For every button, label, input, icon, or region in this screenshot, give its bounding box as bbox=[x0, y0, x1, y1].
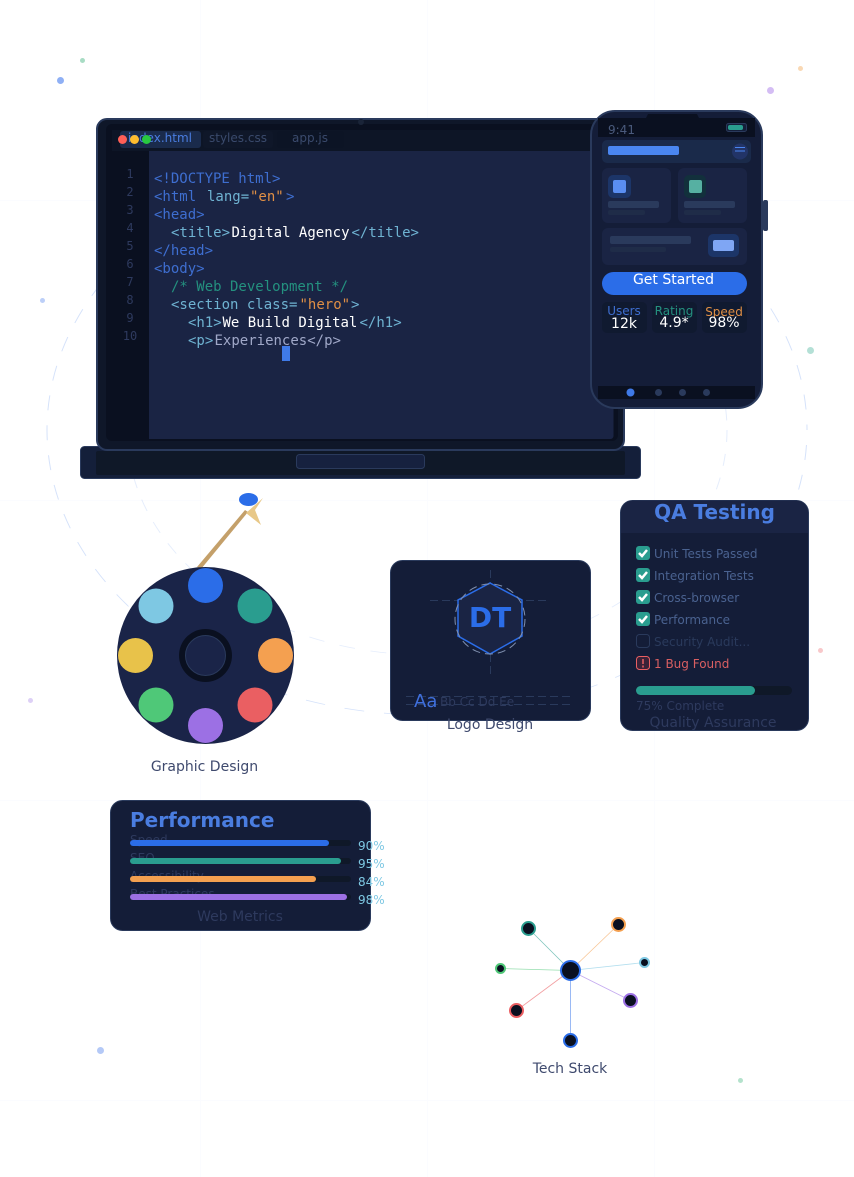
editor tabs bbox=[120, 131, 344, 148]
line numbers bbox=[123, 167, 137, 343]
code text: <p> bbox=[188, 333, 213, 349]
logo hexagon bbox=[455, 583, 525, 654]
code text: "en" bbox=[250, 189, 284, 205]
orbit rings bbox=[47, 145, 807, 715]
code text: <!DOCTYPE html> bbox=[154, 171, 280, 187]
palette centre bbox=[179, 629, 232, 682]
tech stack network: Tech Stack bbox=[532, 1061, 608, 1077]
line numbers: 9 bbox=[126, 311, 134, 325]
qa testing panel: Quality Assurance bbox=[649, 715, 777, 731]
checklist: Unit Tests Passed bbox=[654, 547, 758, 561]
qa progress bar: 75% Complete bbox=[636, 699, 724, 713]
performance panel bbox=[110, 800, 385, 930]
network links bbox=[500, 924, 644, 1040]
checklist: 1 Bug Found bbox=[654, 657, 729, 671]
qa testing panel bbox=[620, 500, 808, 731]
metric labels: SEO bbox=[130, 851, 155, 865]
phone button bbox=[602, 272, 747, 295]
qa testing panel: QA Testing bbox=[654, 500, 775, 524]
phone nav bar bbox=[598, 386, 755, 399]
laptop bbox=[80, 119, 640, 478]
editor tabs: app.js bbox=[292, 131, 328, 145]
checklist: Integration Tests bbox=[654, 569, 754, 583]
checklist: Security Audit... bbox=[654, 635, 750, 649]
line numbers: 7 bbox=[126, 275, 134, 289]
code text: <title> bbox=[171, 225, 230, 241]
code text: </title> bbox=[352, 225, 419, 241]
logo hexagon: DT bbox=[469, 601, 511, 634]
phone bbox=[591, 111, 768, 408]
metric values: 90% bbox=[358, 839, 385, 853]
code text: Experiences</p> bbox=[214, 333, 341, 349]
phone status bar bbox=[598, 114, 755, 137]
metric labels: Accessibility bbox=[130, 869, 204, 883]
performance panel: Web Metrics bbox=[197, 909, 283, 925]
line numbers: 10 bbox=[123, 329, 137, 343]
type specimen: Aa bbox=[414, 691, 437, 712]
line numbers: 6 bbox=[126, 257, 134, 271]
tech stack network bbox=[496, 918, 649, 1077]
code text: > bbox=[286, 189, 294, 205]
qa progress bar bbox=[636, 686, 792, 713]
line numbers: 3 bbox=[126, 203, 134, 217]
phone feature cards bbox=[602, 168, 747, 265]
logo design panel: Logo Design bbox=[447, 717, 533, 733]
phone stats: Rating bbox=[655, 304, 693, 318]
phone stats bbox=[602, 302, 747, 333]
network nodes bbox=[496, 918, 649, 1047]
phone stats: 12k bbox=[611, 316, 638, 332]
phone stats: 4.9* bbox=[659, 315, 689, 331]
line numbers: 5 bbox=[126, 239, 134, 253]
code text: <body> bbox=[154, 261, 205, 277]
checklist bbox=[636, 546, 758, 671]
code text: "hero" bbox=[300, 297, 350, 313]
phone stats: 98% bbox=[708, 315, 740, 331]
checklist: Cross-browser bbox=[654, 591, 739, 605]
metric values: 95% bbox=[358, 857, 385, 871]
paintbrush bbox=[197, 493, 263, 569]
metric labels bbox=[130, 833, 215, 901]
laptop base bbox=[80, 446, 640, 478]
code text: </head> bbox=[154, 243, 213, 259]
laptop screen frame bbox=[97, 119, 624, 450]
metric bars bbox=[130, 840, 351, 900]
type specimen bbox=[406, 691, 573, 712]
code text bbox=[154, 171, 419, 361]
metric values: 98% bbox=[358, 893, 385, 907]
performance panel: Performance bbox=[130, 808, 274, 832]
editor tabs: styles.css bbox=[209, 131, 267, 145]
metric values bbox=[358, 839, 385, 907]
logo design panel bbox=[390, 560, 590, 733]
code text: </h1> bbox=[360, 315, 402, 331]
metric values: 84% bbox=[358, 875, 385, 889]
checklist: Performance bbox=[654, 613, 730, 627]
code text: We Build Digital bbox=[222, 315, 357, 331]
code text: > bbox=[351, 297, 359, 313]
phone button: Get Started bbox=[633, 272, 714, 288]
phone status bar: 9:41 bbox=[608, 123, 635, 137]
metric labels: Speed bbox=[130, 833, 168, 847]
graphic design palette: Graphic Design bbox=[151, 759, 258, 775]
type specimen: Bb Cc Dd Ee bbox=[440, 695, 514, 709]
code text: lang= bbox=[207, 189, 249, 205]
logo construction guides bbox=[430, 570, 547, 677]
metric labels: Best Practices bbox=[130, 887, 215, 901]
code text: Digital Agency bbox=[232, 225, 350, 241]
line numbers: 8 bbox=[126, 293, 134, 307]
line numbers: 2 bbox=[126, 185, 134, 199]
phone stats: Speed bbox=[705, 305, 743, 319]
editor tabs: index.html bbox=[128, 131, 192, 145]
graphic design palette bbox=[117, 493, 294, 775]
code text: /* Web Development */ bbox=[171, 279, 348, 295]
paint swatches bbox=[118, 568, 293, 743]
phone header card bbox=[602, 140, 751, 163]
line numbers: 1 bbox=[126, 167, 134, 181]
code text: <head> bbox=[154, 207, 205, 223]
code text: <section class= bbox=[171, 297, 297, 313]
phone stats: Users bbox=[607, 304, 641, 318]
code text: <html bbox=[154, 189, 196, 205]
window controls bbox=[118, 135, 151, 144]
code text: <h1> bbox=[188, 315, 222, 331]
code editor bbox=[118, 131, 614, 439]
line numbers: 4 bbox=[126, 221, 134, 235]
